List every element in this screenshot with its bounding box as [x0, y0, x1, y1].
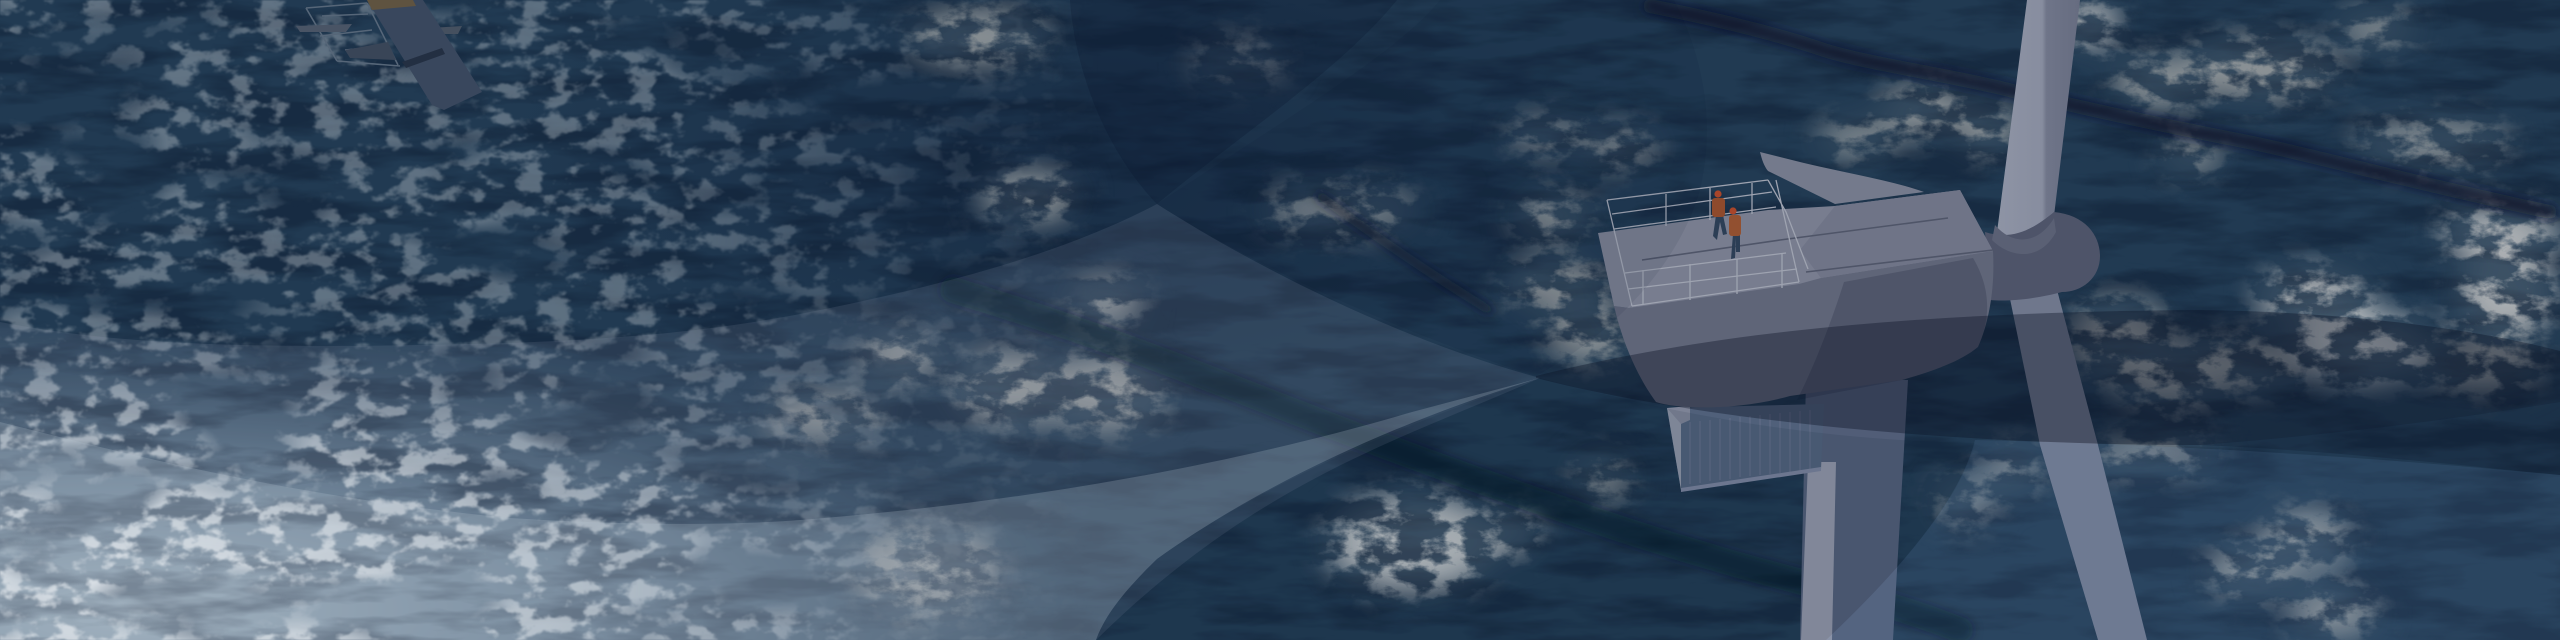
lower blade — [2009, 286, 2147, 640]
translucent arc: shade across the nacelle — [1797, 258, 1987, 400]
workers on the deck — [1712, 190, 1741, 259]
translucent arc: dark lens across the right — [1536, 310, 2560, 445]
worker one — [1712, 190, 1727, 240]
distant turbine foundation at upper left — [296, 0, 482, 110]
blade shadows on the water — [953, 6, 2550, 630]
deck seams — [1642, 218, 1993, 272]
translucent arc: dark crescent at top centre — [1070, 0, 1397, 204]
foundation column — [367, 0, 482, 110]
deck railing — [1607, 180, 1808, 306]
hub — [1985, 212, 2100, 301]
tower — [1800, 380, 1908, 640]
upper blade — [1996, 0, 2080, 240]
worker two — [1729, 207, 1741, 259]
foundation hazard stripes — [367, 0, 416, 10]
main turbine — [1598, 0, 2147, 640]
translucent arc: circle edge right of the crescent — [1157, 0, 1707, 376]
translucent arc: lighter bottom right sector — [1826, 440, 2560, 640]
tower highlight — [1801, 462, 1836, 640]
translucent arc: light band across the left — [0, 204, 1540, 640]
sun glint on the water — [0, 0, 1100, 640]
translucent arc: darker bottom right circle — [1096, 378, 1975, 640]
foam patches — [765, 0, 2560, 636]
foundation lattice platform — [306, 3, 400, 66]
nacelle deck — [1598, 190, 1993, 308]
translucent arc: bright band at lower left — [0, 378, 1540, 640]
nacelle tail fin — [1760, 152, 1924, 204]
nacelle body — [1614, 251, 1993, 407]
container under the nacelle — [1667, 404, 1824, 492]
translucent arc: sliver at the right edge — [2200, 402, 2560, 475]
